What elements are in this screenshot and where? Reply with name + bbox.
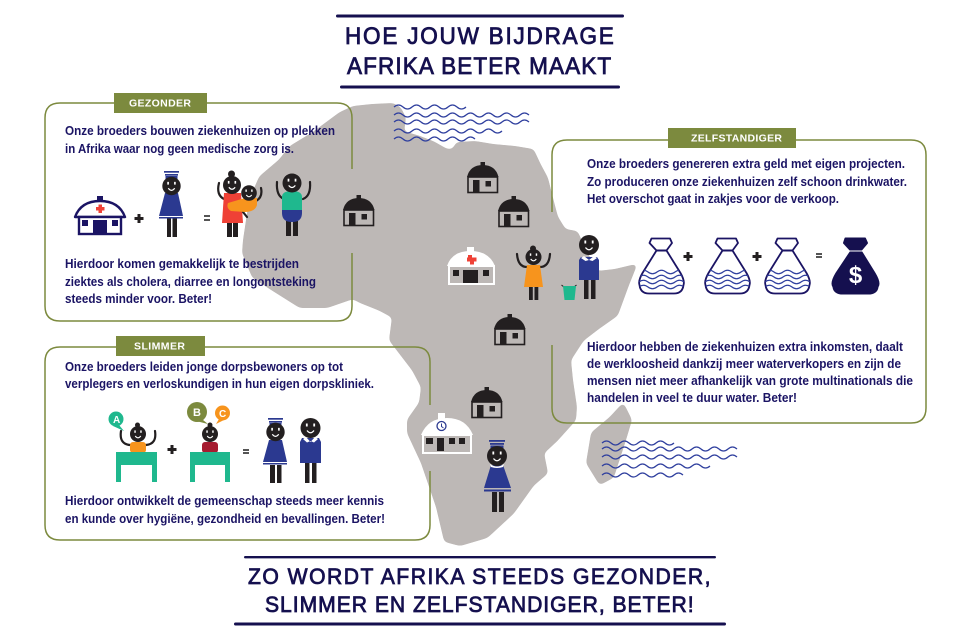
panel: zelfstandiger [552, 128, 926, 423]
icon: money bag [832, 238, 879, 294]
icon: student with B and C bubbles: C [219, 409, 226, 420]
text: intro slimmer [65, 359, 374, 391]
text: result gezonder: steeds minder voor. Beter! [65, 291, 212, 306]
label: zelfstandiger [668, 128, 796, 148]
panel: slimmer [45, 336, 430, 540]
equals [243, 449, 249, 454]
label: slimmer [116, 336, 205, 356]
map of Africa [243, 104, 636, 545]
icon: water bag 1 [639, 238, 684, 294]
text: result slimmer: en kunde over hygiëne, gezondheid en bevallingen. Beter! [65, 511, 385, 526]
equals [816, 253, 822, 258]
icon: white hospital on map [447, 247, 495, 284]
text: intro gezonder: in Afrika waar nog geen medische zorg is. [65, 141, 294, 156]
icon: hut south [471, 387, 502, 418]
icon: male nurse [300, 418, 321, 483]
icon: white clinic with clock [421, 413, 473, 453]
icon: student A at desk [108, 412, 157, 482]
closing message: ZO WORDT AFRIKA STEEDS GEZONDER, [248, 563, 710, 589]
equals [204, 215, 210, 221]
label: gezonder [114, 93, 207, 113]
icon: hut north-east [498, 196, 530, 227]
icon: hut north [467, 162, 498, 193]
icon: woman in orange dress [517, 246, 550, 300]
label: slimmer: SLIMMER [134, 340, 185, 352]
icon: nurse on map [484, 440, 511, 512]
title: AFRIKA BETER MAAKT [347, 52, 611, 79]
icon: money bag: $ [849, 262, 863, 289]
icon: nurse [159, 171, 183, 237]
text: intro zelfstandiger: Zo produceren onze ziekenhuizen zelf schoon drinkwater. [587, 174, 907, 189]
text: result gezonder: ziektes als cholera, diarree en longontsteking [65, 274, 316, 289]
text: result zelfstandiger: handelen in veel te duur water. Beter! [587, 390, 797, 405]
text: result zelfstandiger: de werkloosheid dankzij meer waterverkopers en zijn de [587, 356, 901, 371]
icon: person with raised arms [277, 174, 310, 236]
text: result zelfstandiger: mensen niet meer afhankelijk van grote multinationals die [587, 373, 913, 388]
waves: indian ocean [602, 441, 737, 477]
text: result slimmer: Hierdoor ontwikkelt de gemeenschap steeds meer kennis [65, 493, 384, 508]
text: intro zelfstandiger [587, 156, 907, 206]
icon: water bag 3 [765, 238, 810, 294]
icon: hut west [343, 195, 374, 226]
text: intro zelfstandiger: Het overschot gaat in zakjes voor de verkoop. [587, 191, 839, 206]
closing message [234, 556, 726, 626]
text: result slimmer [65, 493, 385, 526]
text: result gezonder: Hierdoor komen gemakkelijk te bestrijden [65, 256, 299, 271]
plus [134, 214, 144, 223]
icon: mother with baby [218, 170, 261, 237]
icon: student A at desk: A [113, 415, 120, 426]
text: intro zelfstandiger: Onze broeders genereren extra geld met eigen projecten. [587, 156, 905, 171]
icon: water bag 2 [705, 238, 750, 294]
icon: hospital outline [75, 196, 125, 234]
text: result zelfstandiger: Hierdoor hebben de ziekenhuizen extra inkomsten, daalt [587, 339, 904, 354]
closing message: SLIMMER EN ZELFSTANDIGER, BETER! [265, 591, 694, 617]
icon: man in blue [579, 235, 599, 299]
icon: student with B and C bubbles: B [193, 407, 201, 419]
label: zelfstandiger: ZELFSTANDIGER [691, 132, 782, 144]
icon: hut centre [494, 314, 526, 345]
text: intro slimmer: verplegers en verloskundigen in hun eigen dorpskliniek. [65, 376, 374, 391]
text: intro gezonder [65, 123, 335, 156]
text: result zelfstandiger [587, 339, 913, 405]
text: intro slimmer: Onze broeders leiden jonge dorpsbewoners op tot [65, 359, 344, 374]
panel: gezonder [45, 93, 352, 321]
icon: nurse graduate [263, 418, 287, 483]
icon: student with B and C bubbles [187, 402, 230, 482]
text: intro gezonder: Onze broeders bouwen ziekenhuizen op plekken [65, 123, 335, 138]
title [336, 14, 624, 88]
plus [168, 445, 176, 454]
icon: bucket [562, 285, 576, 300]
title: HOE JOUW BIJDRAGE [345, 22, 614, 49]
waves: north sea [394, 105, 529, 141]
text: result gezonder [65, 256, 316, 306]
plus [684, 252, 692, 261]
plus [752, 252, 762, 261]
label: gezonder: GEZONDER [129, 98, 191, 110]
